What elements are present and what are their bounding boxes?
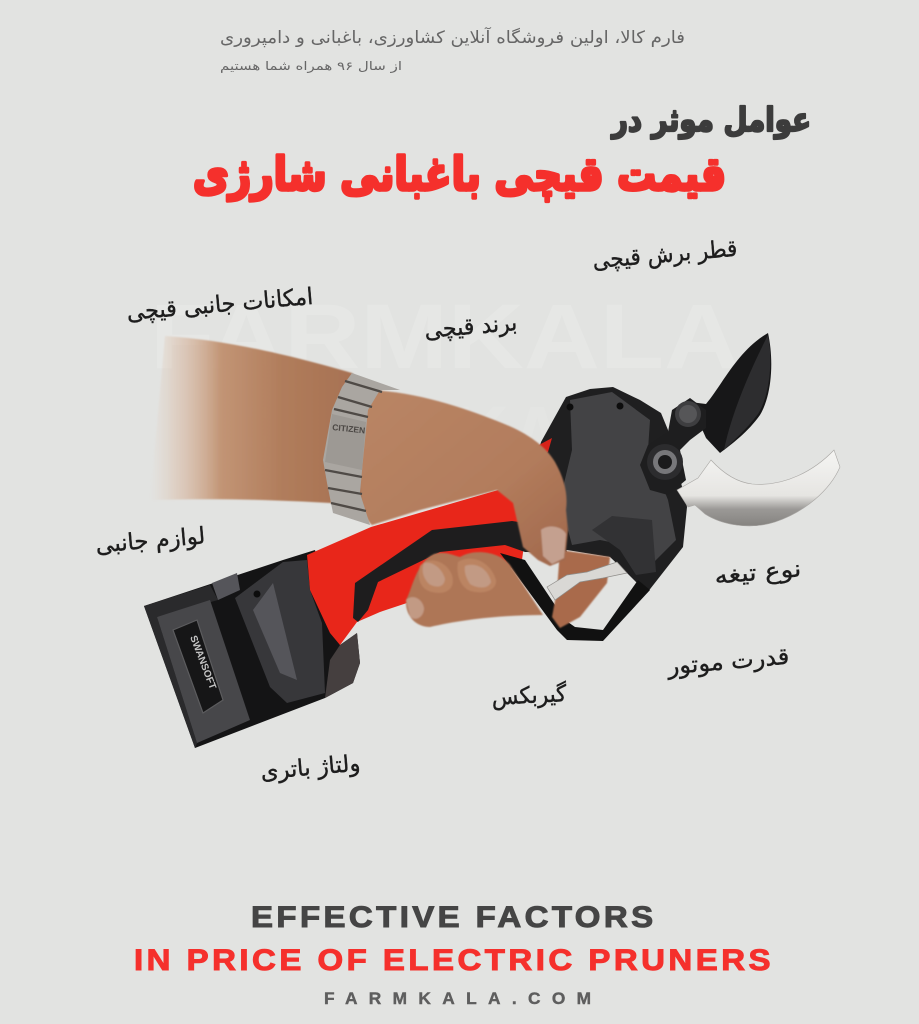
upper black blade bbox=[690, 333, 771, 453]
label: side features: امکانات جانبی قیچی bbox=[126, 284, 314, 326]
label: blade type: نوع تیغه bbox=[713, 556, 802, 590]
pivot assembly bbox=[640, 398, 706, 495]
red grip bbox=[307, 490, 567, 645]
English heading line 2: IN PRICE OF ELECTRIC PRUNERS bbox=[134, 942, 774, 977]
battery brand text: SWANSOFT bbox=[187, 634, 218, 691]
lower silver blade bbox=[677, 450, 840, 526]
watermark: FARMKALA bbox=[230, 388, 670, 490]
watermark: FARMKALA bbox=[150, 286, 740, 388]
wristwatch bbox=[323, 373, 400, 525]
trigger bbox=[547, 562, 627, 600]
title: Persian heading bbox=[193, 100, 811, 202]
header sub-tagline: از سال ۹۶ همراه شما هستیم bbox=[220, 59, 402, 74]
title: Persian red line: قیمت قیچی باغبانی شارژی bbox=[193, 147, 726, 202]
header tagline bbox=[220, 26, 685, 74]
index finger behind trigger bbox=[552, 550, 610, 628]
factor labels bbox=[94, 236, 802, 785]
label: battery voltage: ولتاژ باتری bbox=[259, 751, 361, 785]
header tagline: فارم کالا، اولین فروشگاه آنلاین کشاورزی، باغبانی و دامپروری bbox=[220, 26, 685, 48]
title: Persian heading: عوامل موثر در bbox=[610, 100, 811, 140]
pruner head housing bbox=[525, 387, 687, 593]
trigger guard bbox=[500, 553, 650, 641]
label: cutting diameter: قطر برش قیچی bbox=[592, 236, 738, 274]
fingers bbox=[406, 552, 543, 627]
forearm bbox=[150, 336, 372, 505]
English heading line 1: EFFECTIVE FACTORS bbox=[251, 899, 657, 934]
label: accessories: لوازم جانبی bbox=[94, 523, 206, 559]
label: motor power: قدرت موتور bbox=[665, 644, 790, 680]
hand and thumb bbox=[360, 390, 568, 566]
label: gearbox: گیربکس bbox=[491, 680, 567, 711]
watch brand: CITIZEN bbox=[332, 422, 366, 435]
battery bbox=[144, 550, 360, 748]
watermark bbox=[150, 286, 740, 490]
illustration: hand holding electric pruner bbox=[144, 333, 840, 748]
label: pruner brand: برند قیچی bbox=[423, 310, 518, 344]
website: FARMKALA.COM bbox=[324, 989, 602, 1008]
